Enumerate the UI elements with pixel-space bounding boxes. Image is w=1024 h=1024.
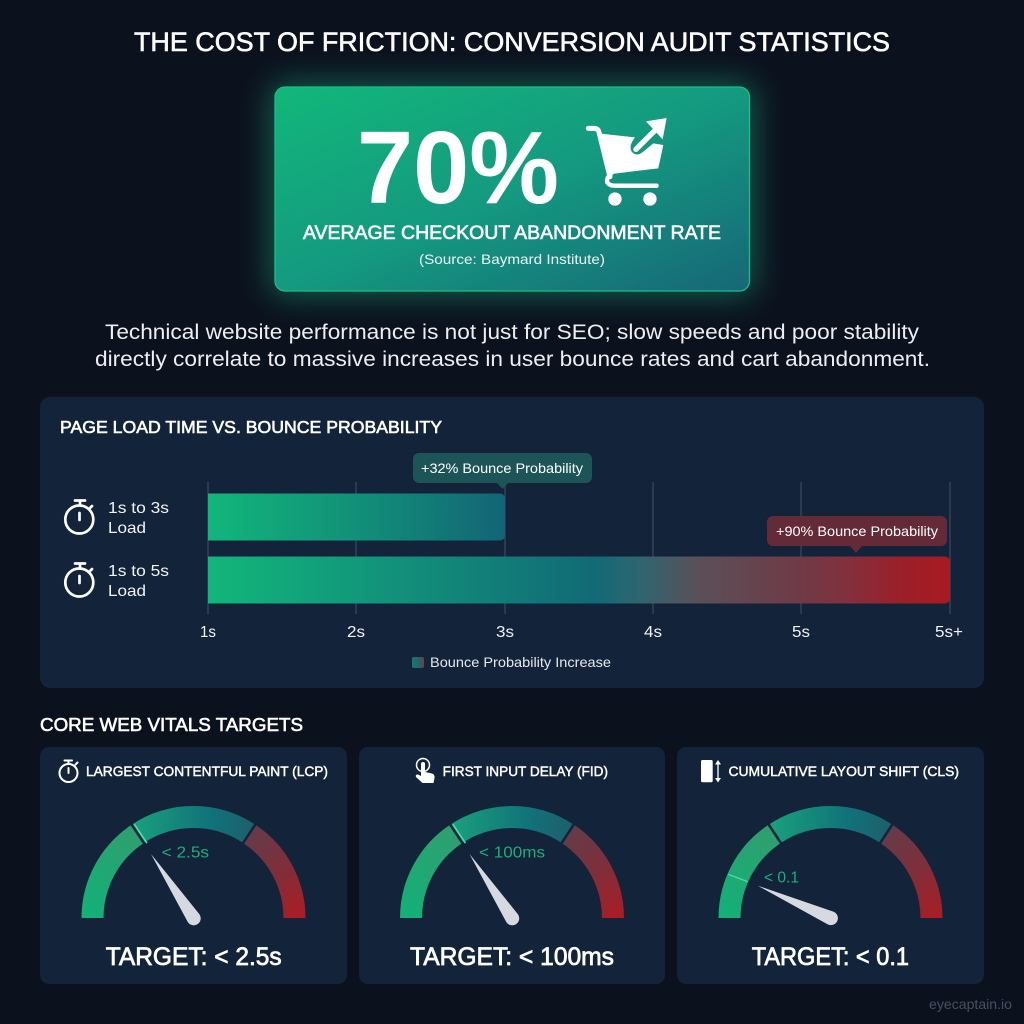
icon: stopwatch row 1: [65, 500, 93, 534]
icon: layout shift: [701, 760, 721, 782]
axis labels: 5s: [792, 624, 810, 641]
source: (Source: Baymard Institute): [419, 251, 605, 267]
panel: page load time chart: Load: [108, 583, 146, 600]
intro text: [95, 320, 930, 371]
icon: tap hand: [416, 758, 435, 783]
axis labels: [200, 624, 963, 641]
bar: 1s to 5s: [208, 556, 950, 604]
icon: stopwatch row 2: [65, 564, 93, 596]
intro text: directly correlate to massive increases in user bounce rates and cart abandonment.: [95, 347, 930, 371]
gauge: [92, 817, 294, 925]
card label: FIRST INPUT DELAY (FID): [443, 764, 608, 779]
card label: LARGEST CONTENTFUL PAINT (LCP): [86, 764, 328, 779]
section heading: CORE WEB VITALS TARGETS: [40, 715, 303, 735]
icon: stopwatch: [60, 760, 78, 782]
panel: page load time chart: [40, 397, 984, 688]
target: TARGET: < 0.1: [752, 943, 909, 971]
gauge: [728, 817, 932, 925]
axis labels: 2s: [347, 624, 365, 641]
panel: hero statistic: [270, 82, 755, 296]
panel: LCP card: [40, 747, 347, 984]
callout: +32%: +32% Bounce Probability: [421, 460, 583, 476]
needle: [470, 854, 519, 925]
icon: cart with rising arrow: [588, 118, 667, 206]
gauge value: < 2.5s: [162, 844, 209, 862]
bar: 1s to 3s: [208, 494, 505, 540]
axis labels: 5s+: [935, 624, 963, 641]
needle: [758, 886, 838, 925]
needle: [151, 854, 201, 925]
title: THE COST OF FRICTION: CONVERSION AUDIT STATISTICS: [134, 27, 890, 57]
row label 1: 1s to 3s: [108, 500, 169, 517]
panel: page load time chart: Load: [108, 520, 146, 537]
axis labels: 1s: [200, 624, 216, 641]
big number: 70%: [357, 110, 559, 225]
chart heading: PAGE LOAD TIME VS. BOUNCE PROBABILITY: [60, 417, 442, 437]
panel: FID card: [359, 747, 665, 984]
gauge value: < 100ms: [479, 844, 545, 862]
intro text: Technical website performance is not just for SEO; slow speeds and poor stability: [105, 320, 919, 344]
card label: CUMULATIVE LAYOUT SHIFT (CLS): [728, 764, 959, 779]
callout: +90%: +90% Bounce Probability: [776, 523, 938, 539]
gauge: [411, 817, 613, 925]
hero label: AVERAGE CHECKOUT ABANDONMENT RATE: [303, 222, 721, 244]
axis labels: 3s: [496, 624, 514, 641]
axis labels: 4s: [644, 624, 662, 641]
gauge value: < 0.1: [764, 869, 799, 886]
row label 2: 1s to 5s: [108, 563, 169, 580]
footer watermark: eyecaptain.io: [929, 996, 1012, 1012]
target: TARGET: < 100ms: [410, 943, 614, 971]
panel: CLS card: [677, 747, 984, 984]
legend: Bounce Probability Increase: [430, 654, 611, 670]
callout: +32%: [413, 453, 592, 489]
target: TARGET: < 2.5s: [106, 943, 282, 971]
callout: +90%: [767, 516, 947, 553]
